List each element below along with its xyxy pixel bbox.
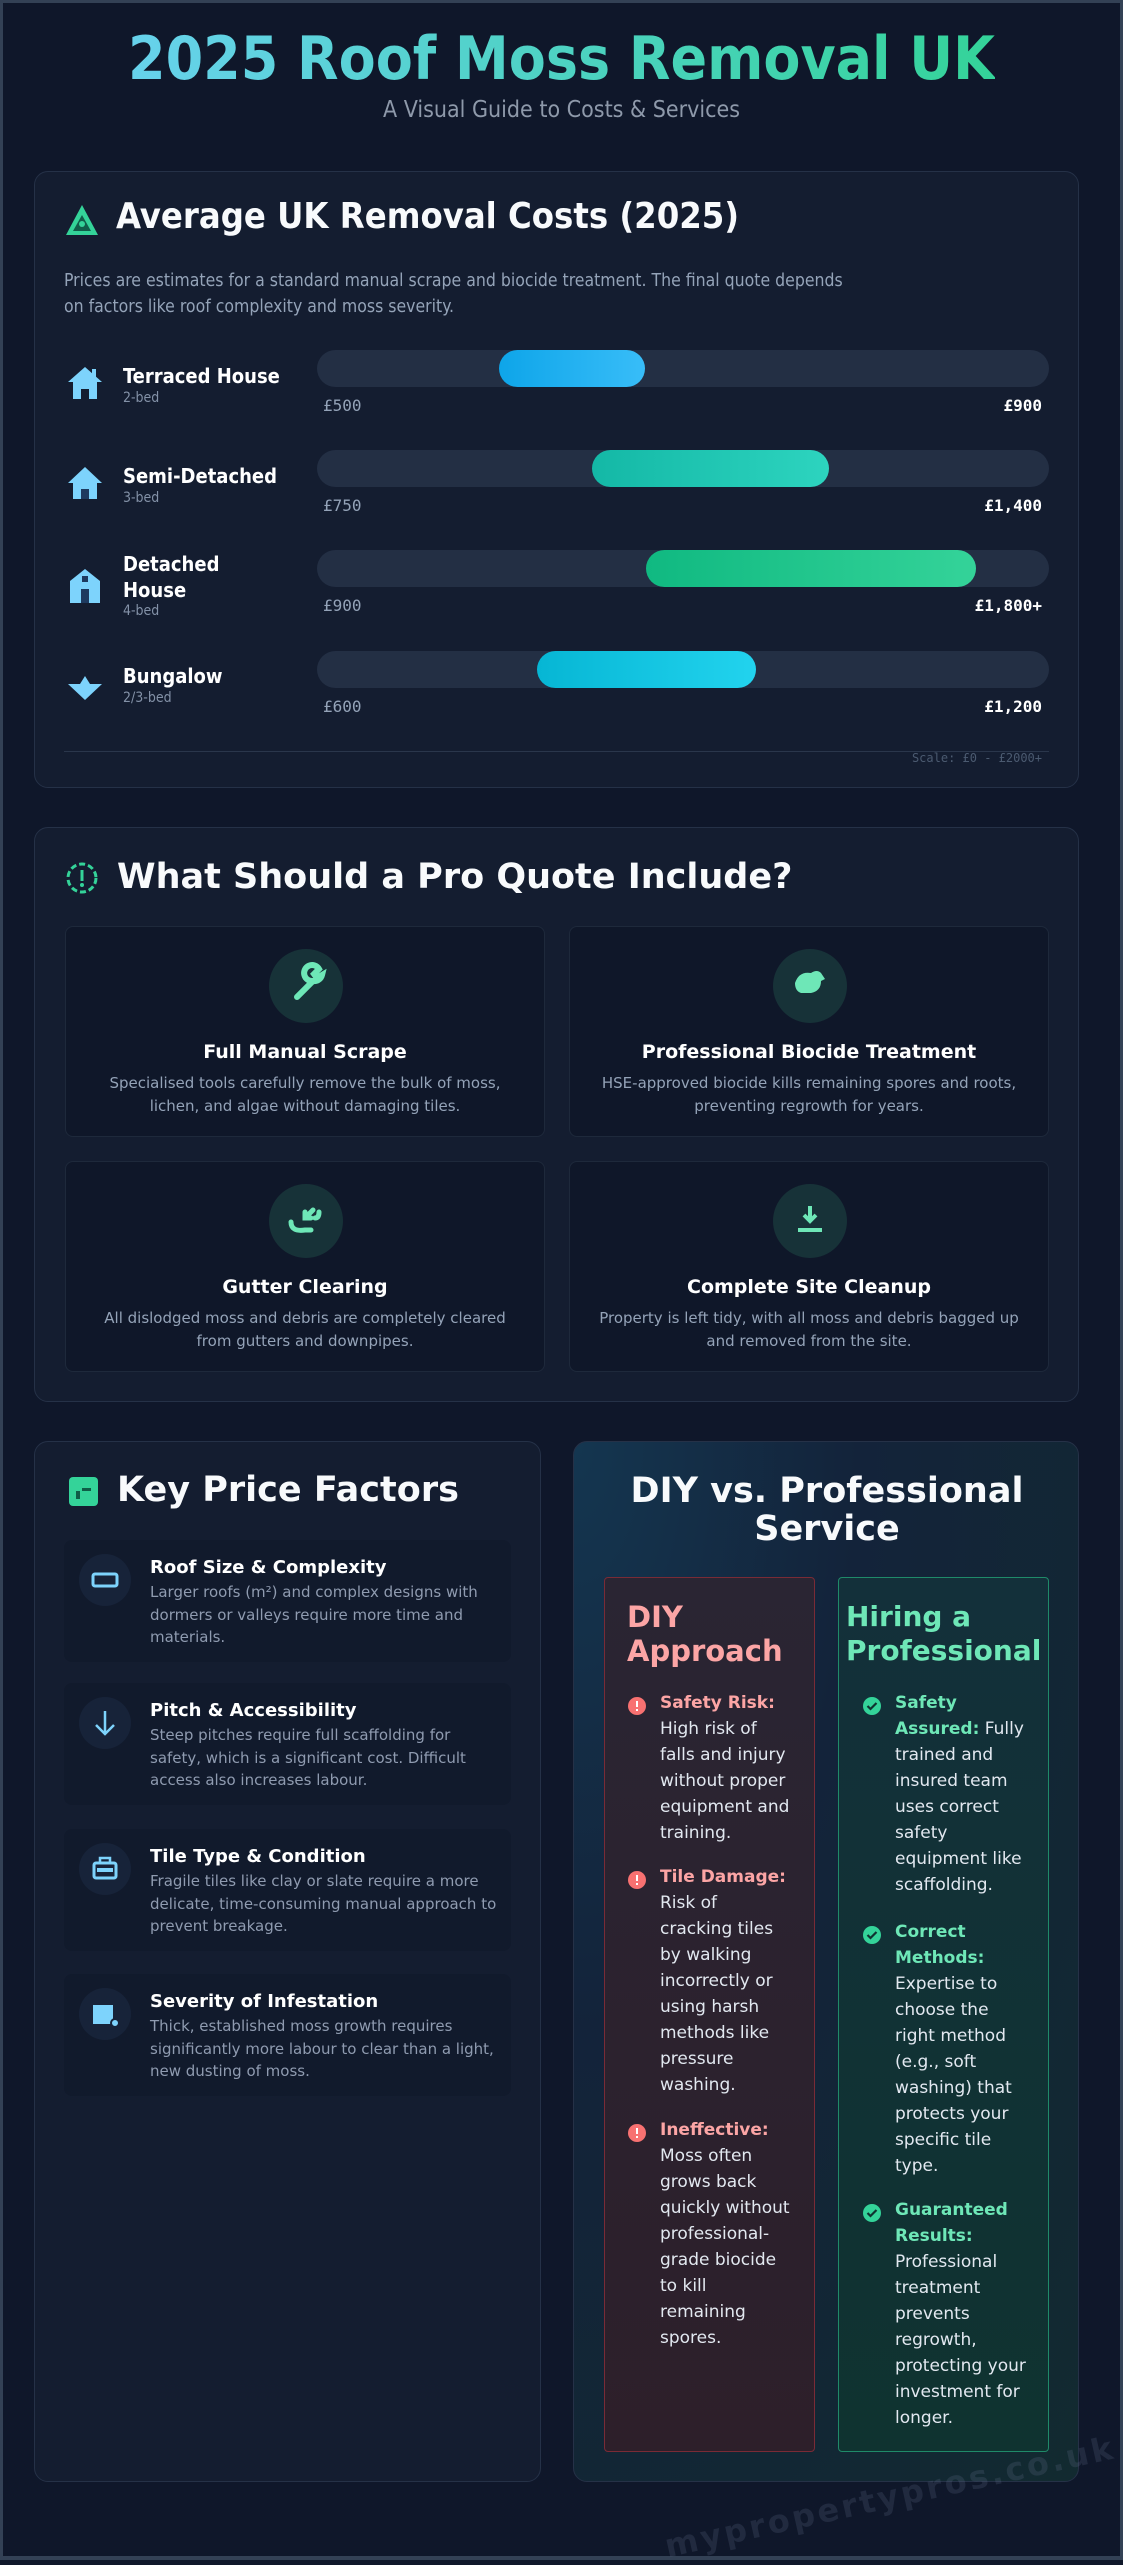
box: DIY: DIY [627,1600,683,1634]
item: guaranteed results: longer. [895,2408,953,2428]
item: correct methods: (e.g., soft [895,2052,976,2072]
row: semi-detached: £1,400 [984,496,1042,515]
box: DIY [604,1577,815,2452]
icon: triangle [66,205,98,235]
heading: pro quote: What Should a Pro Quote Include? [117,857,792,897]
row: semi-detached: Semi-Detached [123,464,277,488]
row: bungalow: Bungalow [123,664,223,688]
item: correct methods: Correct [895,1922,966,1942]
row: semi-detached: 3-bed [123,490,159,506]
panel: average costs [34,171,1079,788]
title: 2025 Roof Moss Removal UK [128,24,995,94]
item: safety risk: equipment and [660,1797,789,1817]
item: correct methods: right method [895,2026,1006,2046]
item: tile damage: cracking tiles [660,1919,773,1939]
card: cleanup [569,1161,1049,1372]
item: safety assured: safety [895,1823,947,1843]
heading: diy vs pro [631,1471,1023,1549]
card: gutter: All dislodged moss and debris are completely cleared [104,1309,506,1327]
item: correct methods: protects your [895,2104,1008,2124]
card: cleanup: and removed from the site. [706,1332,912,1350]
item: guaranteed results: Professional [895,2252,997,2272]
item: safety assured: equipment like [895,1849,1022,1869]
heading: costs: Average UK Removal Costs (2025) [116,196,739,237]
factor: pitch: Pitch & Accessibility [150,1700,356,1721]
panel: pro quote [34,827,1079,1402]
item: guaranteed results: Results: [895,2226,973,2246]
item: correct methods: washing) that [895,2078,1012,2098]
item: guaranteed results: treatment [895,2278,980,2298]
item: safety assured: trained and [895,1745,993,1765]
heading: diy vs pro: Service [754,1509,900,1549]
row: detached: £1,800+ [975,596,1042,615]
box: pro [838,1577,1049,2452]
item: ineffective [628,2120,790,2348]
item: ineffective: remaining [660,2302,746,2322]
box: DIY: Approach [627,1634,783,1668]
card: manual scrape: Full Manual Scrape [203,1041,407,1063]
card: manual scrape: lichen, and algae without damaging tiles. [150,1097,460,1115]
factor: pitch [64,1683,511,1805]
item: tile damage: methods like [660,2023,769,2043]
subtitle: A Visual Guide to Costs & Services [383,97,740,123]
factor: severity [64,1974,511,2096]
card: biocide: HSE-approved biocide kills remaining spores and roots, [602,1074,1016,1092]
heading: factors: Key Price Factors [117,1470,459,1510]
item: safety risk: training. [660,1823,731,1843]
row: terraced: £500 [323,396,362,415]
row: terraced: 2-bed [123,390,159,406]
row: bungalow: £600 [323,697,362,716]
heading: diy vs pro: DIY vs. Professional [631,1471,1023,1511]
description: Prices are estimates for a standard manual scrape and biocide treatment. The final quote depends [64,271,843,291]
row: bungalow [68,651,1049,716]
item: correct methods: type. [895,2156,938,2176]
factor: tile type: Fragile tiles like clay or slate require a more delicate, time-consuming manual approach to prevent breakage. [150,1872,496,1935]
card: biocide: Professional Biocide Treatment [642,1041,976,1063]
item: guaranteed results: prevents [895,2304,970,2324]
item: correct methods: Expertise to [895,1974,997,1994]
item: tile damage [628,1867,786,2095]
item: guaranteed results: Guaranteed [895,2200,1008,2220]
item: safety risk: High risk of [660,1719,757,1739]
item: ineffective: grows back [660,2172,756,2192]
row: semi-detached [68,450,1049,515]
item: ineffective: professional- [660,2224,769,2244]
item: safety assured: insured team [895,1771,1008,1791]
card: cleanup: Property is left tidy, with all moss and debris bagged up [599,1309,1019,1327]
item: safety assured: Safety [895,1693,957,1713]
item: ineffective: Moss often [660,2146,752,2166]
item: safety risk: without proper [660,1771,785,1791]
description [64,271,843,317]
item: tile damage: using harsh [660,1997,759,2017]
row: detached: 4-bed [123,603,159,619]
factor: pitch: Steep pitches require full scaffolding for safety, which is a significant cost. Difficult access also increases labour. [150,1726,466,1789]
item: guaranteed results: regrowth, [895,2330,977,2350]
row: semi-detached: £750 [323,496,362,515]
row: bungalow: 2/3-bed [123,690,172,706]
item: safety risk: falls and injury [660,1745,786,1765]
item: safety assured: uses correct [895,1797,999,1817]
icon: badge [66,862,98,894]
item: correct methods: Methods: [895,1948,984,1968]
factor: roof size: Roof Size & Complexity [150,1557,386,1578]
row: terraced [68,350,1049,415]
item: ineffective: Ineffective: [660,2120,769,2140]
card: biocide [569,926,1049,1137]
factor: roof size [64,1540,511,1662]
item: correct methods [863,1922,1012,2176]
Pro items [863,1693,1026,2428]
row: bungalow: £1,200 [984,697,1042,716]
card: manual scrape: Specialised tools carefully remove the bulk of moss, [110,1074,500,1092]
item: tile damage: pressure [660,2049,733,2069]
item: tile damage: washing. [660,2075,736,2095]
item: correct methods: specific tile [895,2130,991,2150]
item: ineffective: to kill [660,2276,706,2296]
item: tile damage: Tile Damage: [660,1867,786,1887]
box: pro: Hiring a [846,1600,971,1633]
factor: severity: Severity of Infestation [150,1991,378,2012]
factor: roof size: Larger roofs (m²) and complex designs with dormers or valleys require more time and materials. [150,1583,478,1646]
icon: factors [69,1477,98,1506]
item: guaranteed results: investment for [895,2382,1020,2402]
item: safety risk: Safety Risk: [660,1693,775,1713]
card: cleanup: Complete Site Cleanup [687,1276,931,1298]
factor: tile type [64,1829,511,1951]
item: tile damage: Risk of [660,1893,717,1913]
row: detached [70,550,1049,619]
row: terraced: £900 [1003,396,1042,415]
card: manual scrape [65,926,545,1137]
box: pro: Professional [846,1634,1041,1667]
watermark: mypropertypros.co.uk [661,2428,1119,2565]
description: on factors like roof complexity and moss severity. [64,297,454,317]
item: tile damage: by walking [660,1945,751,1965]
card: gutter: Gutter Clearing [222,1276,388,1298]
panel: key price factors [34,1441,541,2482]
card: biocide: preventing regrowth for years. [694,1097,924,1115]
card: gutter: from gutters and downpipes. [197,1332,413,1350]
item: safety risk [628,1693,789,1843]
DIY items [628,1693,790,2348]
row: detached: Detached [123,552,219,576]
item: safety assured [863,1693,1024,1895]
item: safety assured: Assured: Fully [895,1719,1024,1739]
factor: tile type: Tile Type & Condition [150,1846,366,1867]
card: gutter [65,1161,545,1372]
item: tile damage: incorrectly or [660,1971,773,1991]
item: guaranteed results [863,2200,1026,2428]
panel: diy vs pro [573,1441,1079,2482]
item: safety assured: scaffolding. [895,1875,993,1895]
item: ineffective: grade biocide [660,2250,776,2270]
factor: severity: Thick, established moss growth requires significantly more labour to clear than a light, new dusting of moss. [150,2017,494,2080]
row: detached: House [123,578,186,602]
row: terraced: Terraced House [123,364,280,388]
item: ineffective: quickly without [660,2198,790,2218]
scale note: Scale: £0 - £2000+ [912,751,1042,765]
item: guaranteed results: protecting your [895,2356,1026,2376]
item: ineffective: spores. [660,2328,721,2348]
item: correct methods: choose the [895,2000,989,2020]
row: detached: £900 [323,596,362,615]
